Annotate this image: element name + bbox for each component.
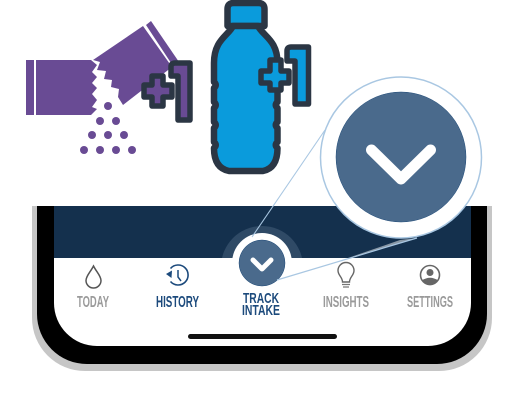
nav item: today <box>77 266 109 311</box>
plus one badge: sachet <box>144 63 190 120</box>
sachet powder dots <box>80 102 136 154</box>
nav item: today: TODAY <box>77 294 109 311</box>
magnified chevron <box>372 150 430 179</box>
phone frame <box>32 206 492 371</box>
nav label: track intake <box>242 290 280 319</box>
callout connector lines <box>252 130 417 280</box>
nav item: insights: INSIGHTS <box>323 294 369 311</box>
magnified callout circle <box>320 77 482 238</box>
small chevron button <box>239 240 285 286</box>
nav label: track intake: TRACK <box>243 290 279 307</box>
nav item: history <box>156 265 199 311</box>
plus one badge: bottle <box>261 47 308 104</box>
icon: torn purple sachet <box>26 21 179 154</box>
nav item: history: HISTORY <box>156 294 199 311</box>
app header band <box>54 206 471 258</box>
nav item: settings: SETTINGS <box>407 294 453 311</box>
track intake button halo <box>215 226 309 310</box>
home indicator <box>188 334 337 339</box>
nav item: insights <box>323 262 369 311</box>
nav label: track intake: INTAKE <box>242 302 280 319</box>
nav item: settings <box>407 266 453 311</box>
icon: water bottle <box>214 3 278 171</box>
